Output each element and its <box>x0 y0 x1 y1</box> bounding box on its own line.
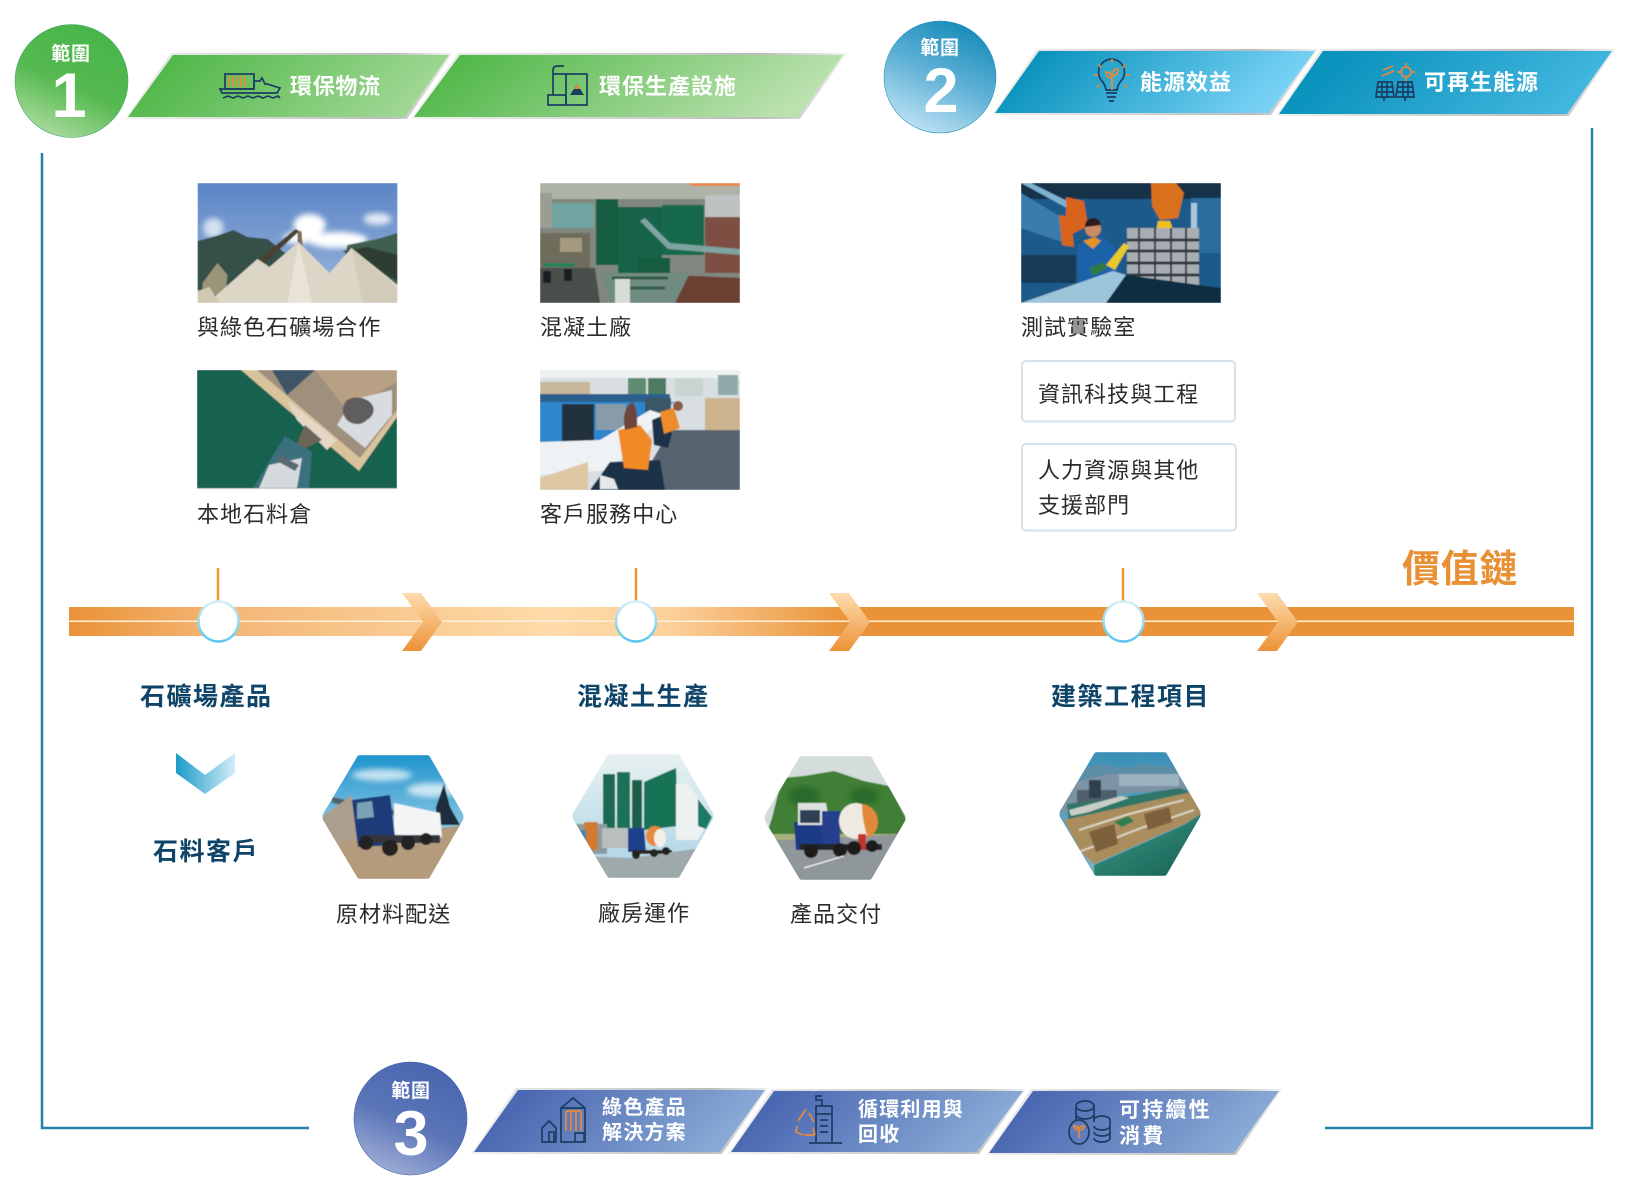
scope 3 ribbon: 可持續性消費: 可持續性 <box>1119 1099 1212 1122</box>
icon: coin stacks <box>1069 1101 1110 1144</box>
scope 3 badge <box>354 1062 467 1175</box>
heading: 混凝土生產: 混凝土生產 <box>577 683 710 711</box>
scope 3 ribbon: 循環利用與回收: 循環利用與 <box>858 1098 964 1121</box>
hexagon photo: product delivery mixer truck <box>764 756 906 880</box>
caption: 與綠色石礦場合作: 與綠色石礦場合作 <box>197 315 381 340</box>
photo: testing laboratory <box>1021 183 1221 303</box>
box: 資訊科技與工程 <box>1022 361 1235 422</box>
chevron 1 <box>402 593 442 651</box>
scope 2 ribbon: 可再生能源: 可再生能源 <box>1424 70 1539 95</box>
box: 資訊科技與工程: 資訊科技與工程 <box>1038 382 1199 407</box>
scope 3 badge: 3 <box>393 1099 429 1169</box>
icon: solar panels <box>1376 63 1415 101</box>
chevron 3 <box>1257 593 1298 651</box>
icon: buildings <box>542 1098 585 1142</box>
caption: 測試實驗室: 測試實驗室 <box>1021 315 1136 340</box>
scope 3 ribbon: 循環利用與回收 <box>728 1089 1026 1154</box>
heading: 石礦場產品: 石礦場產品 <box>140 683 273 711</box>
scope 2 badge: 2 <box>923 56 959 126</box>
scope 1 badge: 範圍 <box>51 42 91 65</box>
scope 2 ribbon: 能源效益 <box>992 49 1318 115</box>
scope 2 badge <box>884 21 996 133</box>
photo: quarry sand piles <box>198 183 398 303</box>
icon: green factory <box>548 66 587 105</box>
scope 1 ribbon: 環保物流: 環保物流 <box>290 74 381 99</box>
scope 2 ribbon: 能源效益: 能源效益 <box>1140 70 1232 95</box>
scope 3 badge: 範圍 <box>391 1079 431 1102</box>
caption: 產品交付: 產品交付 <box>790 902 882 927</box>
node: concrete <box>616 568 656 642</box>
icon: recycling city <box>796 1096 842 1143</box>
scope 1 badge: 1 <box>51 61 87 131</box>
caption: 本地石料倉: 本地石料倉 <box>197 502 312 527</box>
scope 3 ribbon: 循環利用與回收: 回收 <box>858 1123 900 1146</box>
scope 3 ribbon: 綠色產品解決方案: 綠色產品 <box>602 1095 687 1119</box>
hexagon photo: construction project aerial <box>1059 752 1201 876</box>
scope 1 badge <box>15 24 128 138</box>
caption: 廠房運作: 廠房運作 <box>598 901 690 926</box>
caption: 原材料配送: 原材料配送 <box>336 902 451 927</box>
scope 2 header <box>884 21 1615 133</box>
caption: 混凝土廠: 混凝土廠 <box>540 315 632 340</box>
scope 1 header <box>15 24 847 138</box>
scope 2 badge: 範圍 <box>920 36 960 59</box>
scope 3 ribbon: 可持續性消費: 消費 <box>1119 1125 1165 1148</box>
scope 3 ribbon: 可持續性消費 <box>986 1089 1282 1155</box>
scope 3 footer <box>354 1062 1282 1175</box>
photo: local aggregate depot <box>197 370 397 490</box>
hexagon photo: raw material delivery truck <box>322 755 464 879</box>
box: 人力資源與其他支援部門 <box>1022 444 1236 530</box>
heading: 石料客戶: 石料客戶 <box>153 837 259 866</box>
title: 價值鏈: 價值鏈 <box>1402 549 1518 591</box>
arrow: down chevron <box>176 753 235 794</box>
scope 3 ribbon: 綠色產品解決方案: 解決方案 <box>602 1120 687 1144</box>
scope frame border <box>42 128 1592 1128</box>
photo: concrete plant <box>540 183 740 303</box>
box: 人力資源與其他支援部門: 人力資源與其他 <box>1038 458 1199 483</box>
icon: light bulb with leaf <box>1094 59 1130 101</box>
value chain arrow band <box>69 568 1574 651</box>
box: 人力資源與其他支援部門: 支援部門 <box>1038 493 1130 518</box>
scope 3 ribbon: 綠色產品解決方案 <box>471 1088 768 1154</box>
chevron 2 <box>829 593 870 651</box>
scope 1 ribbon: 環保生產設施 <box>411 53 847 119</box>
photo: customer service centre <box>540 370 740 490</box>
node: construction <box>1104 568 1144 642</box>
scope 1 ribbon: 環保生產設施: 環保生產設施 <box>599 74 737 99</box>
heading: 建築工程項目: 建築工程項目 <box>1051 683 1210 711</box>
scope 1 ribbon: 環保物流 <box>125 53 453 119</box>
scope 2 ribbon: 可再生能源 <box>1276 49 1615 116</box>
caption: 客戶服務中心: 客戶服務中心 <box>540 502 678 527</box>
hexagon photo: plant operation <box>572 754 714 878</box>
icon: cargo ship <box>220 74 280 98</box>
node: quarry <box>198 568 238 642</box>
